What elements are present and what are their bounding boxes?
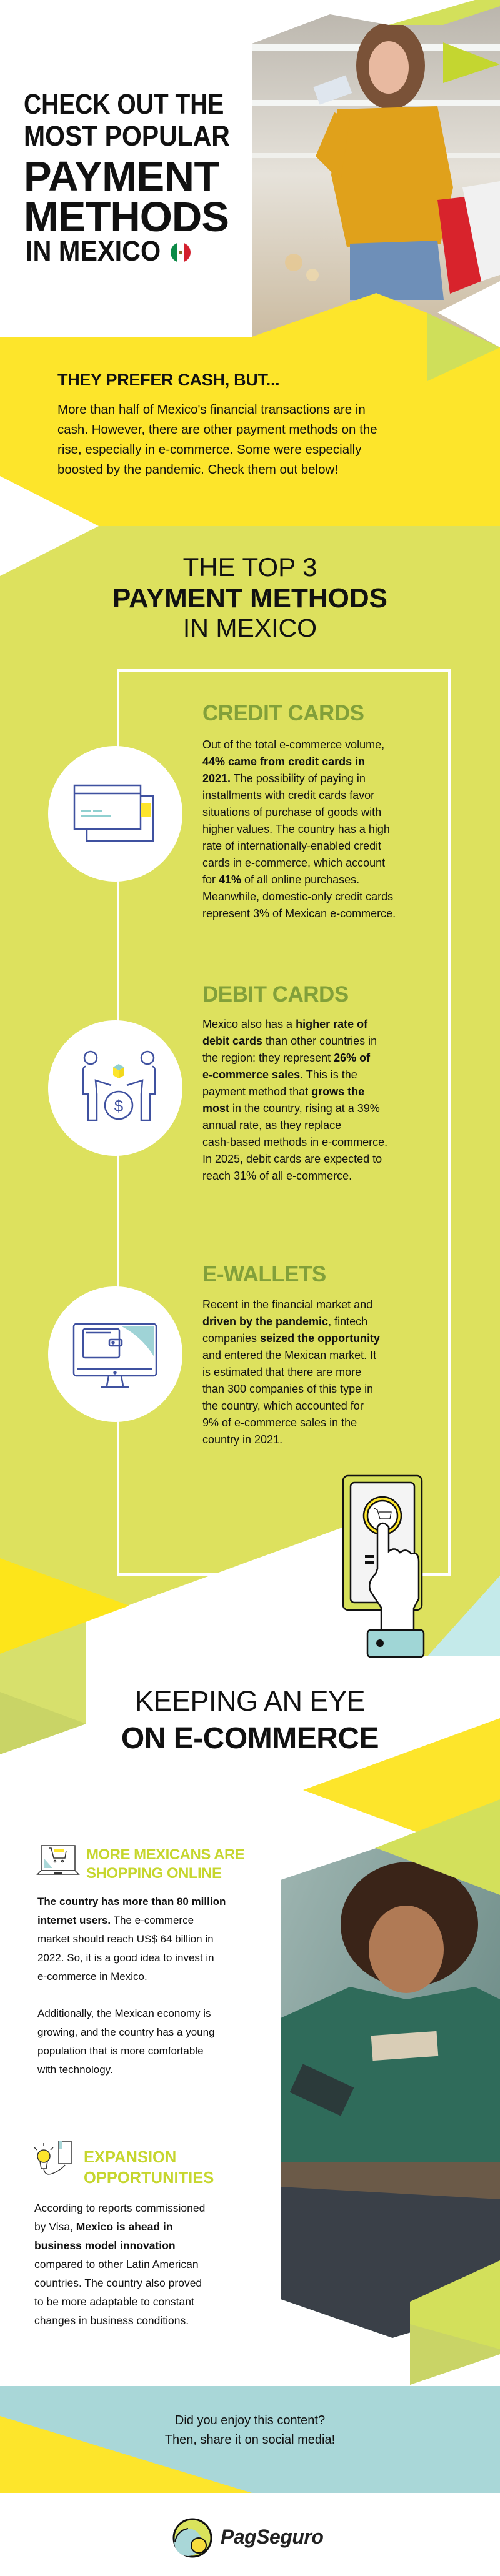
text: growing, and the country has a young <box>38 2026 215 2038</box>
panel: debit cards: annual rate, as they replace <box>202 1119 341 1131</box>
intro text: rise, especially in e-commerce. Some were especially <box>58 442 361 457</box>
panel: expansion opportunities: business model innovation <box>34 2239 176 2252</box>
text: with technology. <box>38 2064 113 2076</box>
title <box>24 88 230 267</box>
panel: credit cards: installments with credit cards favor <box>202 789 374 802</box>
panel: debit cards: reach 31% of all e-commerce. <box>202 1170 352 1182</box>
footer text: Then, share it on social media! <box>165 2433 335 2447</box>
white method box outline <box>118 670 449 1574</box>
panel: debit cards: cash-based methods in e-commerce. <box>202 1136 388 1148</box>
panel: e-wallets: Recent in the financial market and <box>202 1298 372 1311</box>
heading: the top 3 payment methods: PAYMENT METHODS <box>112 583 388 614</box>
panel: more mexicans shopping online: The country has more than 80 million <box>38 1896 226 1907</box>
panel: e-wallets: companies seized the opportunity <box>202 1332 380 1345</box>
panel: more mexicans shopping online: SHOPPING ONLINE <box>86 1865 222 1882</box>
intro text: More than half of Mexico's financial transactions are in <box>58 402 366 417</box>
heading: the top 3 payment methods <box>112 552 388 642</box>
panel: expansion opportunities: to be more adaptable to constant <box>34 2295 194 2308</box>
icon: debit exchange circle <box>48 1020 182 1156</box>
logo: PagSeguro: PagSeguro <box>221 2525 323 2548</box>
panel: credit cards: for 41% of all online purchases. <box>202 873 359 886</box>
panel: more mexicans shopping online: Additionally, the Mexican economy is <box>38 2007 211 2019</box>
lime accents top right <box>389 0 500 347</box>
panel: credit cards: Meanwhile, domestic-only credit cards <box>202 890 393 903</box>
panel: more mexicans shopping online <box>38 1846 244 2076</box>
logo: PagSeguro <box>172 2518 323 2558</box>
yellow intro band <box>0 293 500 576</box>
lime main section <box>0 526 500 2393</box>
panel: credit cards: Out of the total e-commerce volume, <box>202 738 384 751</box>
panel: more mexicans shopping online: market should reach US$ 64 billion in <box>38 1933 214 1945</box>
intro text: cash. However, there are other payment methods on the <box>58 422 378 437</box>
panel: expansion opportunities: compared to other Latin American <box>34 2258 199 2270</box>
panel: e-wallets <box>202 1262 380 1446</box>
panel: expansion opportunities: EXPANSION <box>84 2149 176 2166</box>
panel: e-wallets: country in 2021. <box>202 1433 282 1446</box>
panel: e-wallets: and entered the Mexican market. It <box>202 1349 376 1361</box>
panel: expansion opportunities: countries. The country also proved <box>34 2277 202 2289</box>
panel: more mexicans shopping online: internet users. The e-commerce <box>38 1914 194 1926</box>
icon: credit cards circle <box>48 746 182 882</box>
lime triangles bottom right <box>410 2260 500 2385</box>
heading: keeping an eye on e-commerce: ON E-COMMERCE <box>121 1722 379 1755</box>
panel: expansion opportunities: According to reports commissioned <box>34 2202 205 2214</box>
hero photo: woman shopping <box>250 0 500 350</box>
icon: mexico flag <box>171 242 191 262</box>
icon: laptop cart <box>36 1845 80 1875</box>
panel: e-wallets: 9% of e-commerce sales in the <box>202 1416 357 1429</box>
panel: debit cards: debit cards than other countries in <box>202 1035 377 1047</box>
intro text: boosted by the pandemic. Check them out below! <box>58 462 338 477</box>
panel: debit cards: Mexico also has a higher rate of <box>202 1018 368 1030</box>
panel: expansion opportunities: changes in business conditions. <box>34 2314 189 2327</box>
heading: the top 3 payment methods: IN MEXICO <box>183 614 317 642</box>
title: PAYMENT <box>24 153 219 200</box>
panel: credit cards: higher values. The country has a high <box>202 823 390 835</box>
footer text: Did you enjoy this content? <box>175 2414 325 2427</box>
panel: credit cards: rate of internationally-enabled credit <box>202 840 381 852</box>
panel: credit cards: 2021. The possibility of paying in <box>202 772 366 785</box>
panel: e-wallets: E-WALLETS <box>202 1262 326 1286</box>
icon: hand tapping phone <box>342 1474 425 1658</box>
icon: e-wallet monitor circle <box>48 1286 182 1422</box>
panel: more mexicans shopping online: 2022. So, it is a good idea to invest in <box>38 1952 214 1964</box>
panel: more mexicans shopping online: MORE MEXICANS ARE <box>86 1846 244 1863</box>
lower decorative triangles <box>303 1718 500 1896</box>
second photo: woman with card <box>275 1843 500 2343</box>
text: represent 3% of Mexican e-commerce. <box>202 907 396 920</box>
title: METHODS <box>24 194 229 241</box>
footer band <box>0 2386 500 2493</box>
heading: keeping an eye on e-commerce <box>121 1685 379 1755</box>
panel: expansion opportunities: by Visa, Mexico is ahead in <box>34 2220 172 2233</box>
heading: they prefer cash: THEY PREFER CASH, BUT... <box>58 370 279 389</box>
panel: expansion opportunities: OPPORTUNITIES <box>84 2169 214 2187</box>
panel: expansion opportunities <box>34 2149 214 2327</box>
title: IN MEXICO <box>26 235 161 267</box>
title: MOST POPULAR <box>24 120 230 152</box>
icon: debit exchange circle: $ <box>114 1097 124 1115</box>
panel: credit cards: CREDIT CARDS <box>202 701 364 725</box>
panel: debit cards: In 2025, debit cards are expected to <box>202 1153 382 1165</box>
panel: debit cards: the region: they represent 26% of <box>202 1052 370 1064</box>
panel: e-wallets: than 300 companies of this type in <box>202 1383 373 1395</box>
panel: debit cards: DEBIT CARDS <box>202 982 349 1007</box>
panel: credit cards: situations of purchase of goods with <box>202 806 381 818</box>
intro text <box>58 402 378 477</box>
heading: the top 3 payment methods: THE TOP 3 <box>183 552 317 582</box>
panel: debit cards: payment method that grows the <box>202 1085 364 1098</box>
panel: credit cards <box>202 701 396 920</box>
panel: credit cards: 44% came from credit cards in <box>202 755 365 768</box>
icon: lightbulb and tablet <box>34 2141 72 2175</box>
panel: credit cards: cards in e-commerce, which account <box>202 857 385 869</box>
panel: debit cards <box>202 982 388 1182</box>
panel: more mexicans shopping online: e-commerce in Mexico. <box>38 1971 148 1982</box>
title: CHECK OUT THE <box>24 88 224 120</box>
panel: debit cards: most in the country, rising at a 39% <box>202 1102 380 1115</box>
footer text <box>165 2414 335 2447</box>
heading: keeping an eye on e-commerce: KEEPING AN EYE <box>135 1685 365 1717</box>
panel: e-wallets: the country, which accounted for <box>202 1400 364 1412</box>
text: population that is more comfortable <box>38 2045 204 2057</box>
panel: debit cards: e-commerce sales. This is the <box>202 1068 358 1081</box>
panel: e-wallets: is estimated that there are more <box>202 1366 361 1378</box>
panel: e-wallets: driven by the pandemic, fintech <box>202 1315 368 1328</box>
